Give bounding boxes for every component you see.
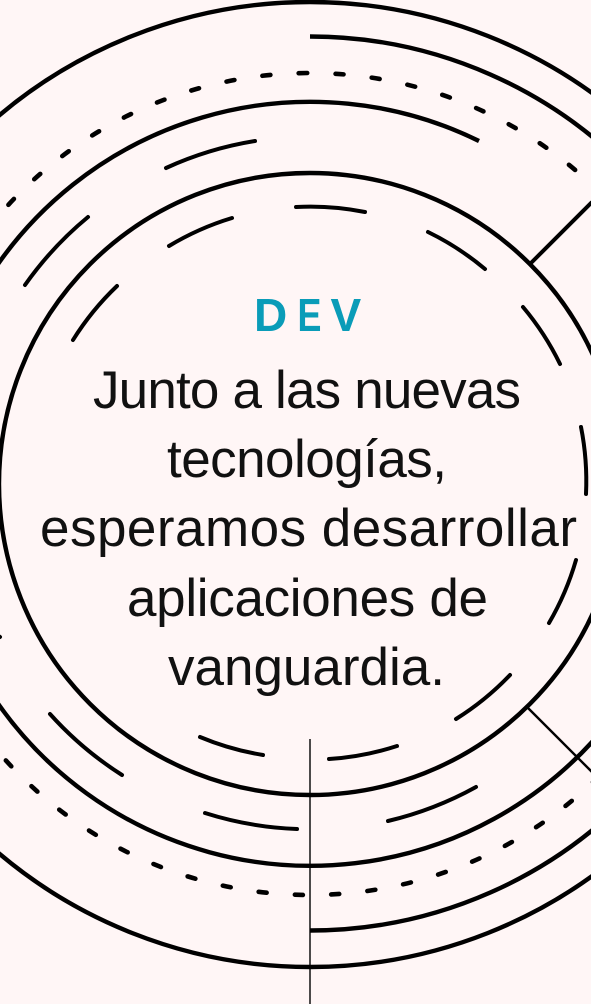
segment: lower right (388, 787, 476, 821)
dash: left (73, 286, 117, 340)
inner dashed ring (73, 207, 586, 759)
connector line: bottom right (528, 708, 591, 772)
heading: D (254, 289, 287, 341)
dash: right lower (549, 560, 576, 623)
body text: esperamos desarrollar (40, 499, 577, 558)
segment: upper left (25, 217, 88, 285)
dash: right upper (523, 307, 560, 364)
body text: tecnologías, (167, 430, 447, 489)
segment: top (166, 141, 255, 168)
heading: V (330, 289, 362, 341)
dash: bottom (329, 746, 397, 759)
dash: right (581, 427, 586, 494)
open ring (0, 102, 591, 866)
body text (40, 361, 577, 697)
connector line: bottom vertical (309, 739, 311, 1004)
heading (254, 289, 362, 341)
main circle (0, 173, 591, 795)
dash: top right (428, 232, 485, 269)
partial ring: top right arc (310, 36, 591, 182)
segment: lower left (50, 714, 122, 775)
dash: bottom right (456, 675, 510, 719)
heading: E (298, 290, 321, 341)
segmented ring (0, 141, 476, 829)
dash: top left (169, 218, 232, 246)
body text: vanguardia. (168, 638, 445, 697)
connector line: top right (530, 202, 591, 264)
segment: bottom (205, 813, 297, 829)
dash: bottom left (200, 737, 263, 755)
body text: aplicaciones de (127, 569, 488, 628)
dash: top (296, 207, 365, 212)
partial ring: bottom right arc (310, 785, 591, 930)
body text: Junto a las nuevas (93, 361, 521, 420)
